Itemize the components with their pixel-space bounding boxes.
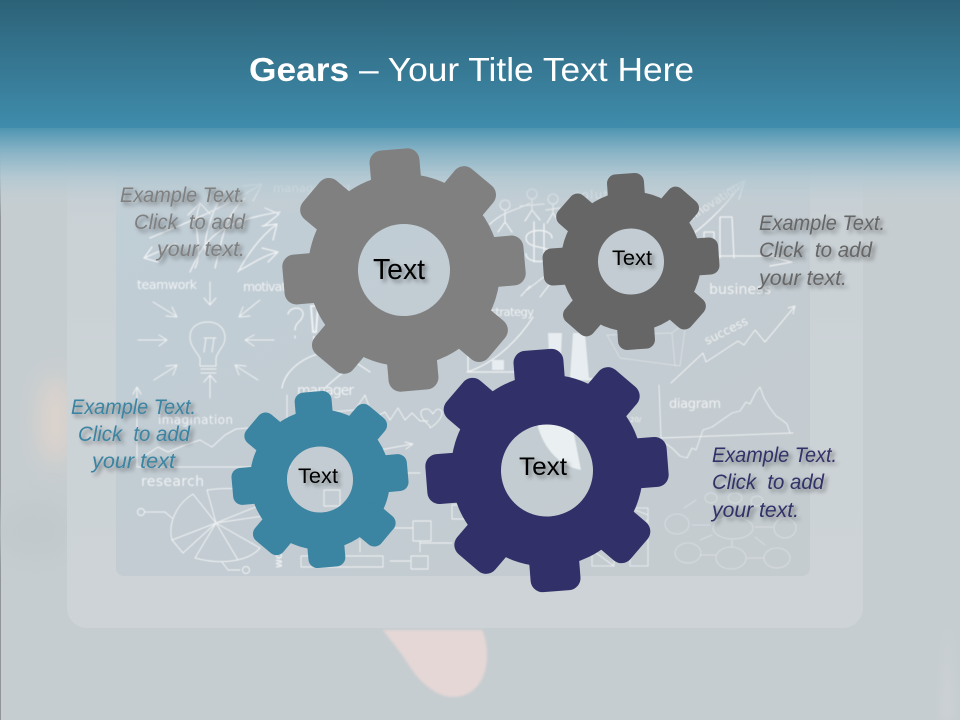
- doodle: handwritten labels: 20/: [630, 416, 642, 424]
- gear: small dark grey: [537, 168, 725, 355]
- doodle: box sketch: [607, 322, 686, 366]
- gear: large navy: [417, 340, 677, 601]
- doodle: handwritten labels: innovation: [684, 180, 743, 225]
- doodle: success arrow: [671, 306, 795, 383]
- whiteboard doodles on the screen: [133, 180, 796, 574]
- doodle: line chart with axes at left: [133, 387, 290, 467]
- gear label: small teal: Text: [298, 465, 338, 488]
- doodle: hatched bars bottom: [592, 508, 648, 566]
- tablet body: [67, 100, 863, 628]
- text block: lower right navy: Example Text.: [712, 443, 837, 467]
- gear label: large grey: Text: [373, 254, 425, 286]
- gear label: large navy: Text: [519, 453, 567, 481]
- doodle: team of people and dollar sign: [490, 189, 560, 262]
- header band with fade: [0, 0, 960, 218]
- gear: large grey: [273, 139, 535, 401]
- gear: small teal: [225, 384, 415, 575]
- text block: top right dark grey: Click to add: [759, 238, 873, 262]
- doodle: handwritten labels: business: [709, 282, 771, 298]
- text block: top left grey: Example Text.: [120, 183, 245, 207]
- doodle: handwritten labels: WO: [275, 552, 284, 568]
- text block: lower left teal: Click to add: [78, 422, 191, 446]
- doodle: handwritten labels: [137, 180, 771, 568]
- doodle: handwritten labels: strategy: [490, 305, 534, 319]
- doodle: handwritten labels: diagram: [669, 397, 721, 412]
- doodle: handwritten labels: management: [273, 181, 351, 195]
- text block: lower right navy: Click to add: [712, 470, 825, 494]
- doodle: handwritten labels: research: [141, 474, 204, 490]
- text block: top right dark grey: Example Text.: [759, 211, 885, 235]
- doodle: handwritten labels: solution: [574, 188, 630, 202]
- doodle: handwritten labels: ning: [518, 418, 536, 428]
- doodle: white bars behind gears: [492, 333, 601, 470]
- doodle: handwritten labels: success: [702, 314, 750, 348]
- text block: top right dark grey: [757, 211, 885, 290]
- text block: lower left teal: [71, 395, 196, 473]
- text block: top right dark grey: your text.: [757, 266, 847, 290]
- doodle: diagram chart: [659, 385, 793, 458]
- doodle: flowchart circles bottom right: [665, 493, 796, 569]
- text block: top left grey: your text.: [155, 237, 245, 261]
- doodle: question, exclamation and curved arrow: [282, 306, 533, 388]
- doodle: ECG line and heart: [287, 395, 442, 473]
- doodle: innovation arrow and bars: [690, 180, 792, 266]
- text block: top left grey: Click to add: [134, 210, 246, 234]
- doodle: handwritten labels: imagination: [158, 413, 233, 427]
- title: Gears – Your Title Text Here: [249, 51, 694, 88]
- doodle: pie chart: [138, 488, 270, 574]
- text block: lower right navy: your text.: [710, 498, 799, 522]
- text block: lower left teal: your text: [90, 449, 176, 473]
- doodle: handwritten labels: motivation: [243, 279, 303, 294]
- doodle: organisation chart boxes: [301, 490, 466, 569]
- tablet screen: [116, 150, 810, 576]
- text block: top left grey: [120, 183, 246, 261]
- doodle: arrows top left: [144, 184, 280, 272]
- doodle: team lower: [521, 276, 553, 297]
- doodle: lightbulb idea with arrows: [138, 282, 274, 398]
- text block: lower right navy: [710, 443, 837, 522]
- gear label: small dark grey: Text: [612, 247, 652, 270]
- finger behind tablet: [383, 630, 487, 697]
- doodle: handwritten labels: teamwork: [137, 277, 198, 292]
- doodle: handwritten labels: manager: [297, 383, 354, 399]
- text block: lower left teal: Example Text.: [71, 395, 196, 419]
